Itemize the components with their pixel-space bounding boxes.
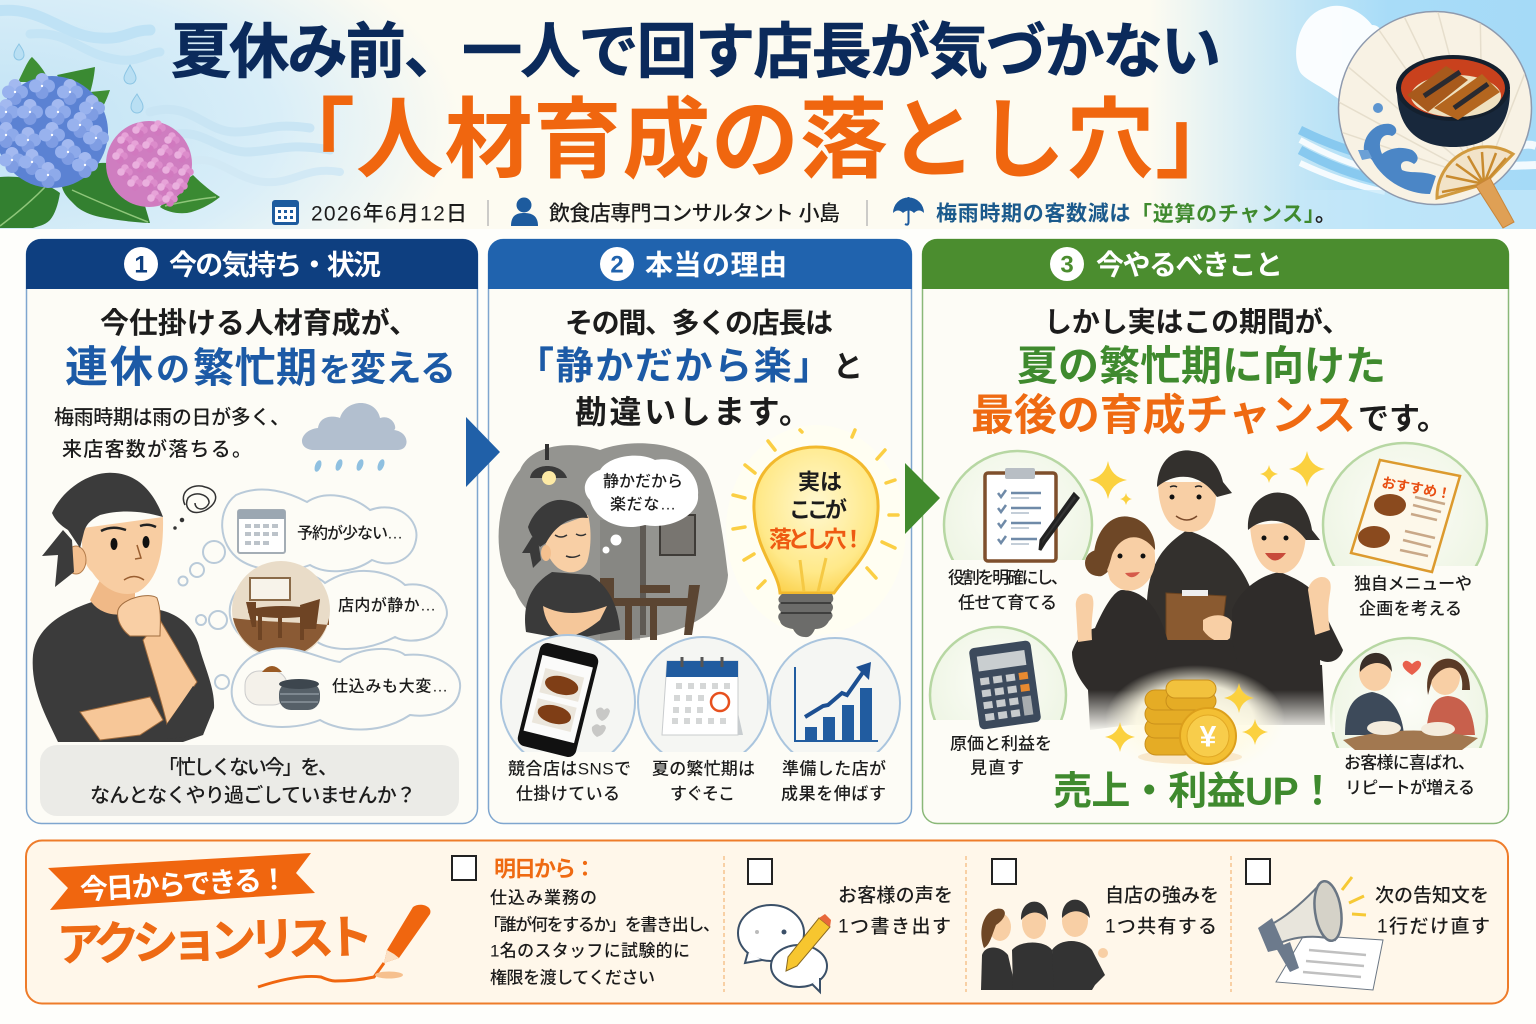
thought bubble: 店内が静か: 店内が静か… [338, 596, 436, 614]
action: menu [1323, 443, 1487, 618]
heading: panel 1: 変える [350, 348, 456, 388]
heading: panel 1: 繁忙期 [193, 345, 317, 391]
panel 3 header [922, 239, 1509, 289]
illustration: worried chef [33, 473, 214, 742]
text: rainy season [54, 406, 290, 461]
icon: hydrangea flowers and leaves [0, 57, 220, 228]
icon: rain cloud [302, 403, 407, 473]
icon: worry scribble [174, 486, 216, 529]
ribbon: 今日からできる [48, 853, 315, 910]
heading: action list: アクションリスト [56, 911, 374, 971]
reason: competitor SNS [501, 635, 635, 804]
reason: competitor SNS: 競合店はSNSで [508, 760, 631, 778]
panel 2 header: 2 [610, 252, 624, 278]
icon: three staff [981, 900, 1108, 990]
illustration: quiet restaurant scene [499, 443, 728, 641]
ribbon: 今日からできる: 今日からできる！ [79, 864, 289, 905]
thought bubble: 仕込みも大変: 仕込みも大変… [332, 678, 448, 696]
meta row: date: 2026年6月12日 [311, 202, 467, 226]
action item 1: 1名のスタッフに試験的に [490, 942, 690, 960]
action: menu: 企画を考える [1359, 600, 1462, 618]
panel 2 header: 本当の理由 [645, 250, 787, 280]
action: calculator [930, 627, 1066, 778]
arrow: panel 2 to 3 [905, 463, 940, 534]
action item 2: 1つ書き出す [838, 916, 951, 938]
heading: panel 1 [65, 306, 456, 392]
callout: question: なんとなくやり過ごしていませんか？ [90, 784, 416, 807]
sparkles [1089, 451, 1325, 752]
heading: panel 1: 今仕掛ける人材育成が、 [100, 306, 418, 340]
action item 4: 1行だけ直す [1377, 916, 1490, 938]
reason: growth chart [770, 638, 900, 804]
thought bubble: 仕込みも大変 [215, 648, 460, 730]
action item 1 [452, 856, 720, 988]
heading: panel 3: 夏の繁忙期に向けた [1017, 343, 1386, 389]
text: sales profit up: 売上・利益UP！ [1053, 770, 1337, 814]
action item 1: 明日から： [494, 856, 596, 882]
arrow: panel 1 to 2 [466, 417, 500, 487]
meta row: rainy season note: 梅雨時期の客数減は「逆算のチャンス」。 [936, 202, 1336, 226]
action: calculator: 原価と利益を [950, 734, 1052, 754]
panel 1 header [26, 239, 478, 289]
thought bubble: 店内が静か [196, 561, 447, 659]
panel 2 header [488, 239, 912, 289]
meta row: author: 飲食店専門コンサルタント 小島 [549, 202, 840, 226]
action item 2 [738, 859, 953, 992]
heading: panel 3: です。 [1358, 402, 1448, 436]
heading: panel 1: を [319, 352, 351, 388]
heading: panel 1: 連休 [65, 344, 153, 392]
speech bubble: 静かだから楽だな: 静かだから [603, 472, 683, 490]
action item 1: 権限を渡してください [490, 968, 655, 988]
action: happy customers: リピートが増える [1345, 778, 1475, 798]
light rays [733, 430, 898, 588]
action item 1: 仕込み業務の [490, 888, 597, 908]
callout: question [40, 745, 459, 816]
reason: calendar: すぐそこ [670, 784, 735, 804]
fan ribs and handle [1437, 147, 1514, 228]
reason: calendar [638, 637, 768, 804]
action: menu: 独自メニューや [1354, 574, 1472, 594]
panel: 本当の理由 [488, 239, 912, 824]
thought bubble: 予約が少ない: 予約が少ない… [297, 524, 403, 542]
illustration: staff team [1072, 450, 1343, 775]
action: clipboard: 役割を明確にし、 [948, 568, 1068, 588]
action item 4: 次の告知文を [1375, 884, 1489, 906]
woman [1072, 516, 1172, 730]
heading: panel 2: 「静かだから楽」と [516, 346, 863, 388]
heading: panel 1: の [156, 351, 190, 389]
action item 4 [1246, 859, 1490, 990]
panel 3 header: 3 [1060, 252, 1074, 278]
water drops [14, 44, 143, 113]
text: rainy season: 梅雨時期は雨の日が多く、 [54, 406, 290, 429]
action: clipboard [944, 451, 1092, 612]
panel: action list [26, 840, 1508, 1004]
reason: competitor SNS: 仕掛けている [516, 784, 620, 804]
reason: calendar: 夏の繁忙期は [652, 760, 755, 778]
right chef [1232, 492, 1343, 725]
reason: growth chart: 準備した店が [782, 758, 886, 778]
icon: uchiwa fan with unagi bowl [1335, 5, 1532, 228]
reason: growth chart: 成果を伸ばす [781, 784, 886, 804]
panel: 今やるべきこと [922, 239, 1509, 824]
icon: light bulb: 実は [798, 470, 842, 494]
icon: megaphone and notice [1258, 877, 1383, 990]
action: menu: おすすめ！ [1381, 474, 1452, 502]
title line 1: 夏休み前、一人で回す店長が気づかない [171, 18, 1221, 86]
coins stack: ¥ [1200, 720, 1217, 754]
action: happy customers: お客様に喜ばれ、 [1344, 754, 1475, 772]
action item 1: 「誰が何をするか」を書き出し、 [484, 914, 720, 934]
sky and clouds right [1296, 6, 1536, 229]
action item 3: 1つ共有する [1105, 916, 1217, 938]
icon: light bulb: ここが [789, 498, 847, 522]
heading: panel 2: 勘違いします。 [575, 394, 811, 430]
header band [0, 0, 1536, 229]
title line 2: 「人材育成の落とし穴」 [267, 90, 1243, 190]
icon: orange pencil and stroke [258, 905, 430, 987]
heading: panel 3: 最後の育成チャンス [971, 392, 1356, 440]
action item 2: お客様の声を [838, 884, 953, 906]
heading: panel 3 [971, 306, 1448, 440]
coins stack [1138, 680, 1242, 764]
speech bubble: 静かだから楽だな [585, 456, 698, 554]
panel 3 header: 今やるべきこと [1096, 250, 1283, 280]
heading: panel 2: その間、多くの店長は [565, 308, 833, 338]
text: rainy season: 来店客数が落ちる。 [62, 438, 252, 461]
callout: question: 「忙しくない今」を、 [158, 756, 338, 779]
panel 1 header: 1 [134, 252, 148, 278]
action item 3 [981, 859, 1219, 990]
water waves left [0, 10, 340, 182]
heading: panel 3: しかし実はこの期間が、 [1044, 306, 1350, 338]
panel: 今の気持ち・状況 [26, 239, 478, 824]
icon: light bulb: 落とし穴！ [769, 526, 865, 552]
center chef [1147, 450, 1255, 700]
icon: light bulb [726, 425, 906, 637]
thought bubble: 予約が少ない [178, 489, 416, 586]
action item 3: 自店の強みを [1105, 884, 1219, 906]
action: happy customers [1331, 638, 1487, 798]
panel 1 header: 今の気持ち・状況 [169, 250, 381, 280]
action: calculator: 見直す [970, 758, 1024, 778]
aprons fading [1090, 640, 1325, 725]
icon: speech bubbles and pencil [738, 905, 831, 992]
heading: panel 2 [516, 308, 863, 430]
speech bubble: 静かだから楽だな: 楽だな… [610, 496, 676, 514]
action: clipboard: 任せて育てる [958, 594, 1057, 612]
